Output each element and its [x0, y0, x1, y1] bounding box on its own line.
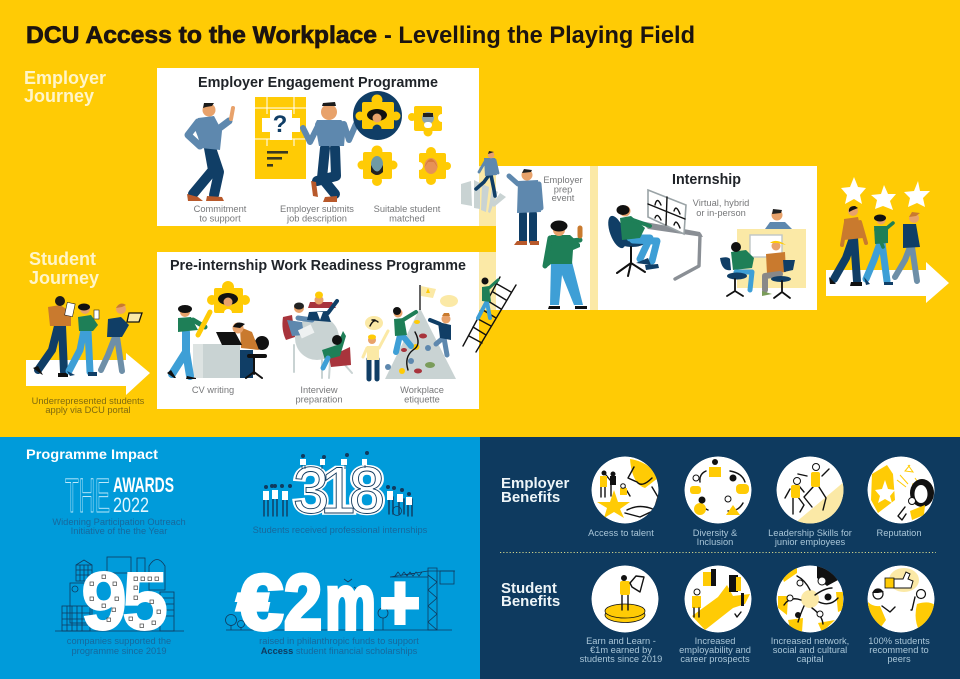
figure: job description sheet	[255, 97, 306, 179]
arrow: journey end	[826, 262, 949, 303]
heading: employer journey: Journey	[24, 86, 94, 106]
icon: earn and learn	[592, 566, 658, 632]
caption: interview preparation: preparation	[295, 394, 343, 404]
panel: pre-internship work readiness programme	[157, 252, 479, 409]
caption: employability: career prospects	[680, 654, 750, 664]
caption: earn and learn: students since 2019	[580, 654, 662, 664]
heading: student journey: Student	[29, 249, 96, 269]
panel: internship	[598, 166, 817, 310]
caption: employability: Increased	[695, 636, 735, 646]
figures: three students walking	[829, 206, 920, 286]
icon: reputation	[868, 456, 934, 524]
stat: 2m plus with crane: 2	[284, 558, 322, 646]
panel heading: Employer Engagement Programme	[198, 74, 438, 91]
caption: 95: programme since 2019	[71, 646, 167, 656]
caption: employability: employability and	[679, 645, 751, 655]
connector strip	[479, 166, 496, 310]
stat: 2m plus with crane: €	[237, 558, 283, 646]
panel heading: Pre-internship Work Readiness Programme	[170, 257, 466, 274]
figure: student at prep event	[543, 220, 587, 309]
figure: employer walking on steps	[461, 151, 506, 213]
caption: job description: Employer submits	[280, 204, 354, 214]
caption: employer prep event: prep	[554, 184, 572, 194]
figure: employer submits job description	[303, 102, 356, 202]
figures: students applying	[33, 296, 142, 377]
panel: employer engagement programme	[157, 68, 479, 226]
caption: reputation: Reputation	[877, 528, 921, 538]
stat: 318	[263, 451, 412, 527]
icon: matched student puzzle in circle	[353, 91, 402, 140]
caption: virtual hybrid: Virtual, hybrid	[693, 198, 749, 208]
caption: commitment: to support	[199, 214, 241, 224]
heading: programme impact: Programme Impact	[26, 447, 159, 462]
stat: 318: 318	[293, 453, 385, 527]
caption: 95: companies supported the	[67, 636, 171, 646]
heading: student benefits: Benefits	[501, 593, 560, 610]
panel: benefits	[480, 437, 960, 679]
logo: THE awards 2022: THE	[65, 470, 110, 523]
scene: workplace etiquette	[363, 285, 458, 379]
icon: access to talent	[592, 456, 658, 524]
stat: 95 with city: 95	[81, 556, 168, 647]
caption: 2m plus: raised in philanthropic funds to support	[259, 636, 419, 646]
icon: employability	[684, 566, 752, 632]
caption: leadership: Leadership Skills for	[768, 528, 852, 538]
caption: 2m plus: Access student financial scholarships	[261, 646, 417, 656]
icon: recommend to peers	[868, 566, 936, 634]
caption: 318: Students received professional internships	[253, 525, 428, 535]
stat: 2m plus with crane: m	[325, 558, 376, 646]
crowd: people around 318	[263, 451, 412, 516]
heading: employer benefits: Employer	[501, 475, 570, 492]
stat: 2m plus with crane: +	[380, 558, 420, 646]
caption: recommend: recommend to	[869, 645, 929, 655]
scene: in-person internship meeting	[720, 209, 806, 298]
figure: employer at prep event	[509, 169, 541, 245]
logo: THE awards 2022: AWARDS	[113, 474, 174, 497]
stat: 95 with city	[55, 556, 184, 647]
scene: virtual internship desk	[605, 190, 703, 279]
caption: workplace etiquette: etiquette	[404, 394, 440, 404]
caption: network: capital	[797, 654, 823, 664]
caption: matched: Suitable student	[374, 204, 441, 214]
title: - Levelling the Playing Field	[384, 22, 695, 49]
caption: workplace etiquette: Workplace	[400, 385, 444, 395]
caption: students apply: Underrepresented students	[32, 396, 145, 406]
caption: leadership: junior employees	[774, 537, 845, 547]
caption: access to talent: Access to talent	[588, 528, 654, 538]
icon: puzzle bearded face	[358, 146, 398, 186]
scene: cv writing	[167, 281, 269, 379]
stat: 2m plus with crane	[226, 558, 455, 646]
caption: portal: apply via DCU portal	[45, 405, 131, 415]
arrow: student journey start	[26, 353, 150, 395]
caption: network: social and cultural	[773, 645, 847, 655]
icon: three stars	[841, 177, 930, 210]
heading: student benefits: Student	[501, 580, 557, 597]
heading: student journey: Journey	[29, 268, 99, 288]
caption: employer prep event: Employer	[543, 175, 583, 185]
title: DCU Access to the Workplace	[26, 22, 377, 49]
caption: earn and learn: Earn and Learn -	[586, 636, 656, 646]
panel heading: Internship	[672, 171, 741, 188]
figure: student climbing ladder	[463, 277, 516, 352]
caption: recommend: 100% students	[868, 636, 930, 646]
caption: award: Widening Participation Outreach	[52, 517, 186, 527]
caption: virtual hybrid: or in-person	[696, 208, 746, 218]
caption: cv writing: CV writing	[192, 385, 234, 395]
figure: job description sheet: ?	[273, 111, 287, 138]
caption: interview preparation: Interview	[300, 385, 338, 395]
icon: puzzle red hair face	[415, 147, 451, 185]
icon: diversity and inclusion	[684, 456, 752, 524]
figure: employer thumbs up	[187, 103, 233, 201]
caption: job description: job description	[286, 214, 347, 224]
panel: programme impact	[0, 437, 480, 679]
caption: diversity: Inclusion	[697, 537, 733, 547]
caption: network: Increased network,	[771, 636, 849, 646]
caption: commitment: Commitment	[194, 204, 247, 214]
logo: THE awards 2022: 2022	[113, 494, 149, 517]
icon: puzzle glasses face	[408, 106, 446, 136]
panel: employer prep event	[496, 166, 598, 310]
caption: earn and learn: €1m earned by	[590, 645, 652, 655]
caption: award: Initiative of the the Year	[71, 526, 167, 536]
caption: matched: matched	[389, 214, 425, 224]
stat: 318: 318	[293, 453, 385, 527]
scene: interview preparation	[282, 292, 352, 378]
caption: employer prep event: event	[552, 193, 575, 203]
title	[26, 22, 695, 49]
icon: network	[776, 566, 844, 632]
caption: diversity: Diversity &	[693, 528, 738, 538]
icon: leadership skills	[776, 456, 845, 527]
heading: employer journey: Employer	[24, 68, 106, 88]
heading: employer benefits: Benefits	[501, 489, 560, 506]
caption: recommend: peers	[887, 654, 911, 664]
